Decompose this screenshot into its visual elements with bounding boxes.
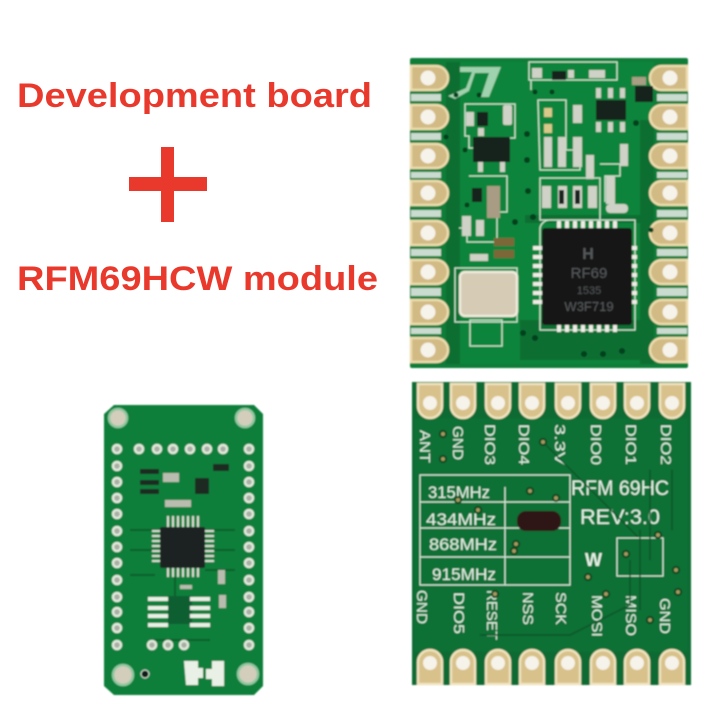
frequency table xyxy=(420,475,570,585)
bottom solder jumper pads xyxy=(184,661,224,686)
frequency table: 868MHz xyxy=(429,535,497,554)
top pin labels: DIO3 xyxy=(481,424,498,465)
bottom pin labels: MISO xyxy=(622,595,639,636)
top pin labels: GND xyxy=(449,426,466,460)
pad holes xyxy=(420,70,678,358)
frequency table: 434MHz xyxy=(426,510,496,529)
silkscreen box xyxy=(617,538,663,576)
vias xyxy=(444,90,654,357)
MCU chip with pins xyxy=(152,516,214,577)
bottom pin labels xyxy=(413,590,673,640)
top pin labels: DIO1 xyxy=(622,424,639,465)
edge pads left xyxy=(411,66,448,362)
bottom pin labels: SCK xyxy=(552,592,569,625)
small via hole xyxy=(141,670,149,678)
RF69 chip: W3F719 xyxy=(564,299,614,314)
board label xyxy=(571,477,669,570)
top pads xyxy=(418,384,684,418)
top pin labels: 3.3V xyxy=(551,424,568,465)
logo mark xyxy=(448,67,501,99)
top pin labels: DIO2 xyxy=(657,424,674,465)
bottom pin labels: GND xyxy=(656,598,673,634)
board body xyxy=(104,405,263,695)
top pin labels: ANT xyxy=(416,430,433,463)
photo: RFM69 module back xyxy=(412,382,691,685)
photo: RFM69 module front xyxy=(410,58,688,368)
board label: W xyxy=(585,550,602,570)
heading: Development board: Development board xyxy=(17,77,372,115)
bottom pin labels: GND xyxy=(413,590,430,624)
chip pins xyxy=(533,221,637,332)
bottom pin labels: MOSI xyxy=(588,595,605,637)
icon: plus sign xyxy=(129,147,207,222)
bottom pin labels: DIO5 xyxy=(450,592,467,634)
bottom pin labels: NSS xyxy=(519,592,536,625)
edge pads right xyxy=(650,66,687,362)
darker traces xyxy=(130,530,235,640)
board body xyxy=(412,382,691,685)
pad holes xyxy=(423,396,679,670)
top pin labels: DIO4 xyxy=(515,424,532,465)
header pins left, right and top xyxy=(113,445,253,649)
RF69 chip xyxy=(533,221,637,332)
crystal xyxy=(460,272,517,316)
frequency table: 915MHz xyxy=(432,565,496,584)
frequency table: 315MHz xyxy=(428,483,490,502)
pad gaps xyxy=(411,94,687,334)
chip markings: H xyxy=(582,246,594,263)
board label: REV:3.0 xyxy=(580,506,660,529)
SOIC footprint xyxy=(148,596,210,627)
dark transistors xyxy=(472,71,653,204)
silkscreen outlines xyxy=(455,62,635,346)
small smd components xyxy=(462,68,646,261)
darker copper areas xyxy=(446,62,654,364)
solder blob xyxy=(517,511,561,531)
smd components xyxy=(140,464,229,494)
top pin labels xyxy=(416,424,674,465)
RF69 chip: RF69 xyxy=(571,265,607,282)
board body xyxy=(410,58,688,368)
board label: RFM 69HC xyxy=(571,477,669,500)
top pin labels: DIO0 xyxy=(587,424,604,465)
bottom pads xyxy=(418,650,684,684)
photo: development board xyxy=(104,405,263,695)
RF69 chip: 1535 xyxy=(577,285,601,297)
heading: RFM69HCW module: RFM69HCW module xyxy=(17,260,378,298)
mounting holes xyxy=(109,409,258,685)
traces and vias xyxy=(480,442,672,635)
bottom pin labels: RESET xyxy=(483,590,500,640)
